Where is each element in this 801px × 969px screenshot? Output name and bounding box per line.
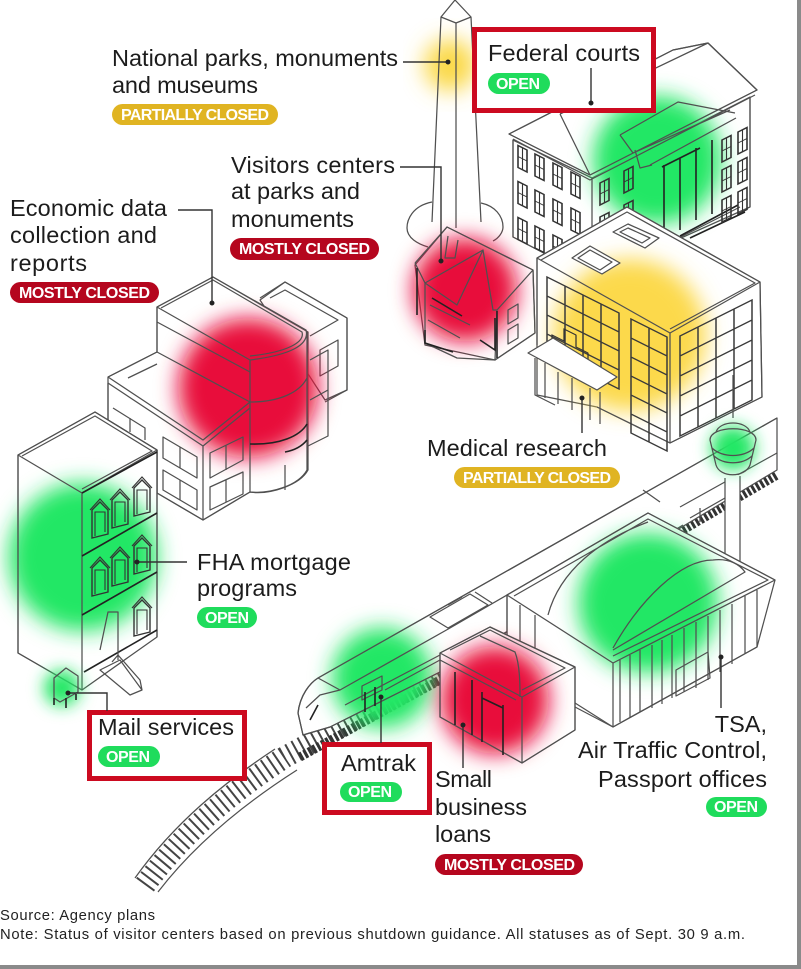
label: economic data: Economic data [10, 195, 168, 221]
label: economic data [10, 195, 168, 303]
label: medical research [427, 435, 620, 488]
illustration: small business bank [440, 627, 575, 763]
illustration: economic data office building [108, 277, 347, 520]
callout: mail services [90, 712, 244, 778]
windows: right face [680, 300, 752, 436]
label: economic data: MOSTLY CLOSED [19, 285, 150, 302]
callout: mail services: OPEN [106, 749, 150, 766]
callout: federal courts [474, 30, 654, 110]
source and note: Source: Agency plans [0, 908, 155, 924]
illustration: Amtrak train [298, 418, 777, 735]
label: medical research: PARTIALLY CLOSED [463, 470, 611, 487]
icon: mailbox [44, 668, 80, 708]
label: visitors centers: Visitors centers [231, 152, 395, 178]
illustration: visitor center house [413, 227, 535, 360]
label: FHA mortgage programs: FHA mortgage [197, 549, 351, 575]
label: visitors centers: monuments [231, 206, 354, 232]
icon: medical cross and canopy [528, 323, 617, 424]
callout: amtrak: OPEN [348, 784, 392, 801]
callout: amtrak: Amtrak [341, 750, 416, 776]
label: small business loans: Small [435, 766, 492, 792]
illustration: federal courts building [509, 43, 757, 280]
label: small business loans: business [435, 794, 527, 820]
label: national parks: and museums [112, 72, 258, 98]
label: visitors centers: MOSTLY CLOSED [239, 241, 370, 258]
label: small business loans: MOSTLY CLOSED [444, 857, 575, 874]
label: FHA mortgage programs [197, 549, 351, 628]
illustration: washington monument [407, 0, 503, 247]
illustration: railway track [135, 475, 777, 892]
label: small business loans: loans [435, 821, 491, 847]
label: TSA, air traffic control, passport offices: TSA, [715, 711, 767, 737]
label: small business loans [435, 766, 583, 875]
label: visitors centers [230, 152, 395, 260]
illustration: air traffic control tower [710, 375, 756, 570]
illustration: FHA rowhouse [9, 412, 157, 708]
label: economic data: collection and [10, 222, 157, 248]
source and note [0, 908, 745, 943]
label: FHA mortgage programs: programs [197, 575, 297, 601]
source and note: Note: Status of visitor centers based on previous shutdown guidance. All statuses as of Sept. 30 9 a.m. [0, 927, 745, 943]
label: FHA mortgage programs: OPEN [205, 610, 249, 627]
callout: federal courts: OPEN [496, 76, 540, 93]
label: TSA, air traffic control, passport offices: Passport offices [598, 766, 767, 792]
label: TSA, air traffic control, passport offices: Air Traffic Control, [578, 737, 767, 763]
label: TSA, air traffic control, passport offices: OPEN [714, 799, 758, 816]
windows: left face [547, 277, 667, 451]
label: national parks: PARTIALLY CLOSED [121, 107, 269, 124]
label: TSA, air traffic control, passport offices [578, 711, 767, 817]
leader lines [65, 60, 723, 768]
illustration: medical research building [528, 207, 762, 451]
callout: mail services: Mail services [98, 714, 234, 740]
callout: federal courts: Federal courts [488, 40, 640, 66]
label: national parks: National parks, monuments [112, 45, 398, 71]
label: economic data: reports [10, 250, 87, 276]
callout: amtrak [324, 744, 430, 812]
label: national parks [112, 45, 398, 125]
illustration: airport terminal [507, 513, 775, 727]
label: medical research: Medical research [427, 435, 607, 461]
label: visitors centers: at parks and [231, 178, 360, 204]
